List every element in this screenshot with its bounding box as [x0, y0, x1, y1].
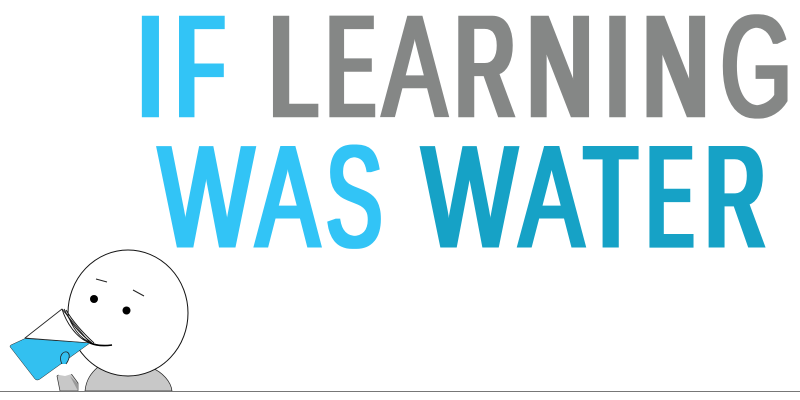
- figure arm: [57, 368, 78, 391]
- title word: WATER: W: [422, 117, 517, 278]
- water: [10, 338, 90, 380]
- icon: stick figure drinking a glass of water: [10, 250, 188, 391]
- hand: [48, 362, 75, 376]
- title word: WAS: [159, 115, 382, 278]
- title word: WAS: A: [256, 116, 319, 277]
- title word: IF: [138, 0, 224, 147]
- glass of water: [10, 309, 112, 380]
- title word: WATER: [422, 115, 765, 278]
- left eye: [90, 295, 98, 303]
- figure body: [85, 367, 172, 391]
- smile: [90, 343, 112, 346]
- eyebrows: [96, 279, 144, 296]
- title word: WATER: R: [706, 116, 765, 277]
- title word: LEARNING: [270, 0, 792, 148]
- right eye: [122, 306, 130, 314]
- thumb: [61, 352, 69, 364]
- title word: WATER: A: [520, 115, 584, 277]
- title word: WATER: E: [648, 117, 692, 277]
- title word: WAS: W: [159, 118, 254, 278]
- arm fold: [70, 376, 78, 391]
- glass outline: [25, 309, 90, 343]
- ground line: [0, 391, 800, 392]
- title word: WAS: S: [326, 115, 382, 277]
- title word: WATER: T: [585, 116, 636, 277]
- glass rim and mouth: [62, 309, 112, 345]
- figure head: [68, 250, 188, 376]
